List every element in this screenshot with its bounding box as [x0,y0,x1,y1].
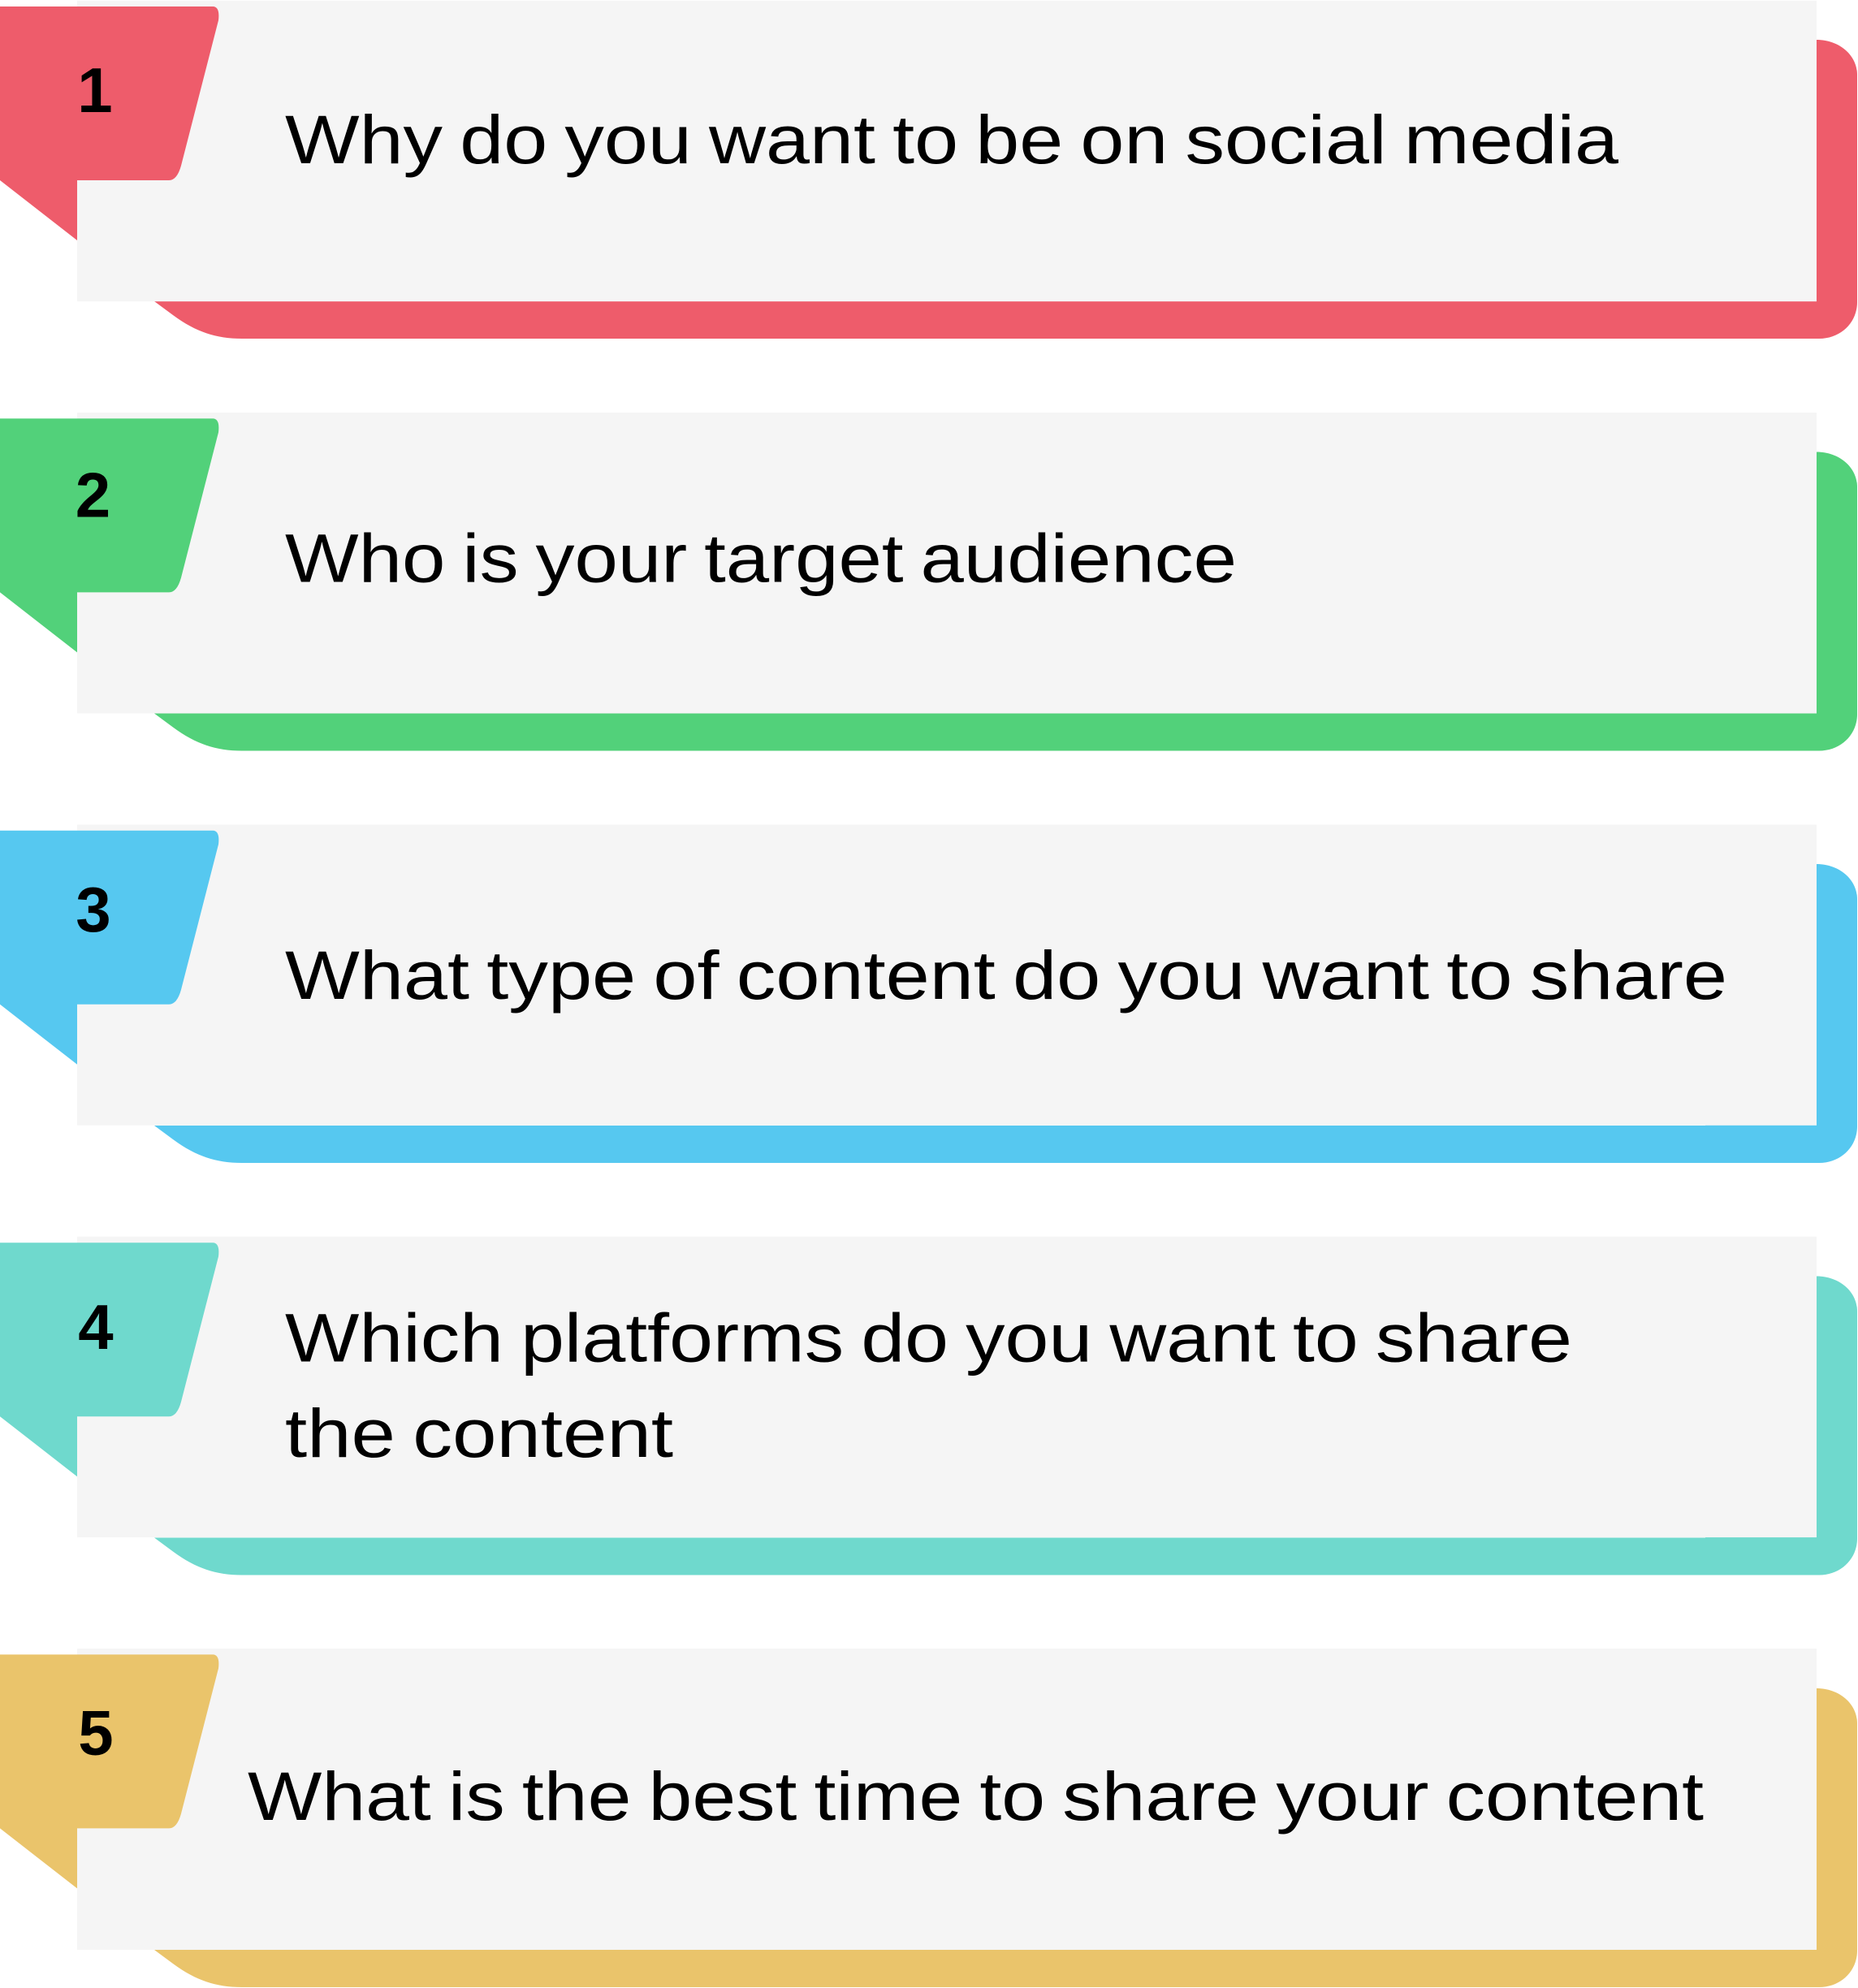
card 4 [0,1237,1857,1575]
card 5 question: What is the best time to share your content [248,1758,1704,1835]
card 4 number: 4 [78,1291,114,1363]
card 5 number flag [0,1654,218,1888]
card 4 panel [77,1237,1817,1537]
card 4 question [285,1299,1572,1472]
card 1 number flag [0,6,218,240]
card 5 [0,1649,1857,1987]
card 1 [0,1,1857,339]
card 1 question: Why do you want to be on social media [285,102,1618,178]
card 1 panel [77,1,1817,301]
card 5 backing shape [154,1688,1857,1987]
card 3 [0,824,1857,1163]
card 5 number: 5 [78,1697,114,1769]
card 2 panel [77,413,1817,713]
card 1 backing shape [154,40,1857,339]
card 4 backing shape [154,1277,1857,1575]
card 4 question: the content [285,1395,673,1472]
card 3 backing shape [154,864,1857,1163]
card 3 number: 3 [76,874,111,945]
card 2 [0,413,1857,750]
card 2 number flag [0,418,218,652]
card 3 panel [77,824,1817,1126]
card 4 question: Which platforms do you want to share [285,1299,1572,1376]
card 3 number flag [0,831,218,1065]
card 2 question: Who is your target audience [285,520,1237,596]
card 3 question: What type of content do you want to share [285,937,1727,1013]
card 5 panel [77,1649,1817,1950]
card 1 number: 1 [77,54,113,126]
card 2 number: 2 [76,460,110,531]
card 4 number flag [0,1242,218,1476]
card 2 backing shape [154,452,1857,750]
